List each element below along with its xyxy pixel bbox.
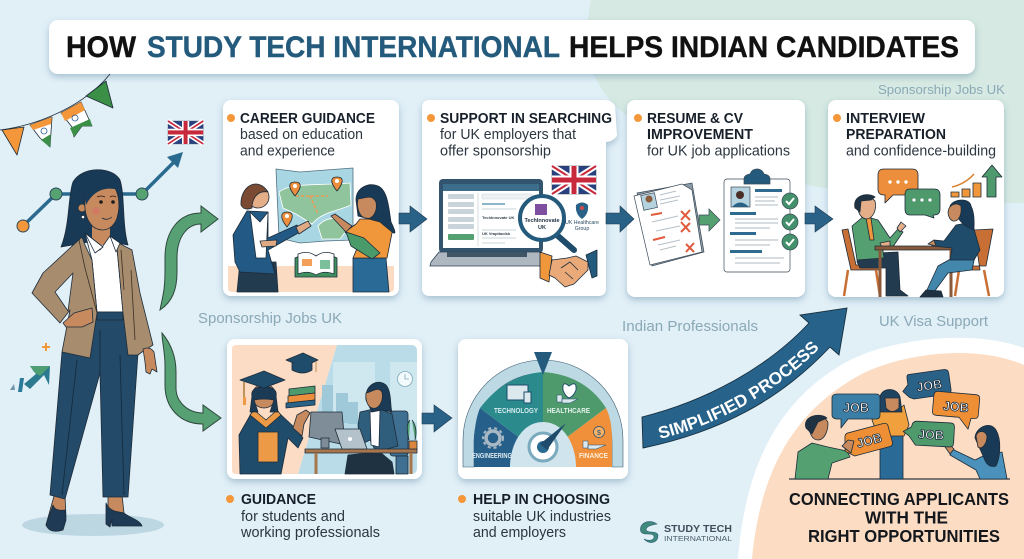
bullet text: help in choosing: HELP IN CHOOSING xyxy=(473,492,610,508)
bullet dot xyxy=(227,114,235,122)
man xyxy=(857,252,908,296)
hands xyxy=(63,308,93,327)
logo: UK Healthcare Group: Group xyxy=(575,226,589,232)
label: engineering xyxy=(472,428,512,460)
label: technology: TECHNOLOGY xyxy=(494,408,538,415)
bullet text: guidance: working professionals xyxy=(240,525,380,541)
panel: connecting applicants circle xyxy=(738,338,1024,559)
heading: resume: RESUME & CV xyxy=(647,111,743,127)
label: healthcare: HEALTHCARE xyxy=(547,408,590,415)
watermark label: Indian Professionals: Indian Professionals xyxy=(622,319,758,335)
label: finance xyxy=(579,426,608,460)
logo: Study Tech International xyxy=(640,522,732,543)
watermark label: Sponsorship Jobs UK left: Sponsorship Jobs UK xyxy=(198,311,342,327)
arrow: search to resume xyxy=(606,206,634,232)
heading: interview: PREPARATION xyxy=(846,127,946,143)
watermark label: Sponsorship Jobs UK top: Sponsorship Jobs UK xyxy=(878,82,1005,97)
label: engineering: ENGINEERING xyxy=(472,453,512,460)
title banner: STUDY TECH INTERNATIONAL xyxy=(147,31,560,64)
green curved arrow to bottom row xyxy=(162,333,221,431)
title banner: HOW xyxy=(66,31,136,64)
illustration: people and job bubbles: JOB xyxy=(918,427,944,443)
growth line chart arrow xyxy=(17,152,183,232)
panel: choosing industries gauge xyxy=(458,339,628,479)
icon: small growth arrow xyxy=(10,343,50,392)
title banner: HELPS INDIAN CANDIDATES xyxy=(569,31,959,64)
label: healthcare xyxy=(547,384,590,415)
logo: Study Tech International: STUDY TECH xyxy=(664,524,732,535)
panel: guidance for students and professionals xyxy=(227,339,422,479)
illustration: laptop job search: UK Vrapitaolsk xyxy=(482,231,511,236)
illustration: laptop job search: UK xyxy=(538,225,546,231)
logo: UK Healthcare Group xyxy=(565,202,599,232)
icon: UK flag xyxy=(552,166,596,194)
illustration: marked up resume xyxy=(634,183,720,266)
illustration: improved CV clipboard xyxy=(724,169,798,272)
magnifier xyxy=(558,236,574,250)
heading: connecting applicants: RIGHT OPPORTUNITIES xyxy=(808,526,1000,546)
panel: career guidance xyxy=(223,100,399,296)
bullet text: help in choosing: suitable UK industries xyxy=(473,509,611,525)
label: finance: $ xyxy=(597,430,601,437)
label: finance: FINANCE xyxy=(579,453,608,460)
illustration: interview at table xyxy=(842,165,1002,297)
heading: career guidance: and experience xyxy=(240,144,335,160)
heading: support in searching: SUPPORT IN SEARCHING xyxy=(440,111,612,127)
illustration: advisor with map xyxy=(228,168,395,292)
growth bars xyxy=(951,165,1002,197)
job bubbles: JOB xyxy=(843,401,869,415)
illustration: people and job bubbles: JOB xyxy=(855,431,883,451)
arrow: guidance to choosing xyxy=(422,405,452,432)
heading: resume: for UK job applications xyxy=(647,144,790,160)
illustration: laptop job search: TechInnovate xyxy=(524,218,560,224)
table xyxy=(875,246,956,250)
centre woman xyxy=(880,435,903,479)
bunting with Indian flags xyxy=(0,74,113,155)
heading: support in searching xyxy=(440,111,612,160)
heading: interview: INTERVIEW xyxy=(846,111,925,127)
panel: support in searching xyxy=(422,100,617,296)
heading: interview: and confidence-building xyxy=(846,144,996,160)
watermark label: UK Visa Support: UK Visa Support xyxy=(879,314,988,330)
face xyxy=(78,204,86,212)
heading: career guidance xyxy=(240,111,375,160)
title banner xyxy=(49,20,975,74)
right woman xyxy=(353,258,389,292)
left woman xyxy=(237,262,278,292)
heading: connecting applicants: CONNECTING APPLICANTS xyxy=(789,489,1009,509)
book xyxy=(295,255,337,277)
panel: interview preparation xyxy=(828,100,1004,297)
illustration: people and job bubbles: JOB xyxy=(943,399,969,415)
icon: handshake xyxy=(540,250,597,287)
heading: resume: IMPROVEMENT xyxy=(647,127,753,143)
right woman xyxy=(950,449,1007,479)
heading: connecting applicants: WITH THE xyxy=(865,508,948,528)
flying cap xyxy=(286,353,318,367)
bullet dot xyxy=(427,114,435,122)
illustration: laptop job search xyxy=(430,166,599,287)
heading: resume xyxy=(647,111,790,160)
legs and shoes xyxy=(46,318,142,531)
bullet text: guidance: GUIDANCE xyxy=(241,492,316,508)
bullet text: help in choosing: and employers xyxy=(473,525,566,541)
bullet text: guidance: for students and xyxy=(241,509,345,525)
logo: Study Tech International: INTERNATIONAL xyxy=(664,534,732,543)
desk worker xyxy=(390,411,408,456)
bullet text: guidance xyxy=(226,492,380,541)
arrow: simplified process: SIMPLIFIED PROCESS xyxy=(658,342,818,438)
icon: small UK flag xyxy=(168,121,203,144)
jacket xyxy=(32,237,97,358)
bullet text: help in choosing xyxy=(458,492,611,541)
arrow: resume to interview xyxy=(805,206,833,232)
neck and shirt xyxy=(92,225,110,245)
chart: industry gauge xyxy=(463,352,623,467)
green curved arrow to top row xyxy=(160,206,218,310)
books xyxy=(286,386,315,408)
arrow: simplified process xyxy=(642,308,848,448)
heading: connecting applicants xyxy=(789,489,1009,546)
left man xyxy=(795,443,850,479)
illustration: people and job bubbles xyxy=(789,369,1010,479)
arrow: career to search xyxy=(399,206,427,232)
hair xyxy=(61,170,128,247)
job bubbles xyxy=(832,394,880,428)
illustration: laptop job search: TechInnovate UK xyxy=(482,215,514,220)
heading: interview xyxy=(846,111,996,160)
chairs xyxy=(842,229,993,296)
illustration: people and job bubbles: JOB xyxy=(916,377,943,394)
heading: support in searching: offer sponsorship xyxy=(440,144,551,160)
graduate xyxy=(239,412,303,474)
desk, monitor, laptop xyxy=(305,449,417,453)
woman professional xyxy=(22,170,164,536)
woman seated xyxy=(926,256,975,292)
heading: career guidance: based on education xyxy=(240,127,363,143)
bullet dot xyxy=(833,114,841,122)
heading: support in searching: for UK employers that xyxy=(440,127,576,143)
illustration: graduate and professional xyxy=(232,345,417,474)
heading: career guidance: CAREER GUIDANCE xyxy=(240,111,375,127)
label: technology xyxy=(494,385,538,415)
bullet dot xyxy=(634,114,642,122)
logo: UK Healthcare Group: UK Healthcare xyxy=(565,220,599,226)
panel: resume and CV improvement xyxy=(627,100,805,297)
